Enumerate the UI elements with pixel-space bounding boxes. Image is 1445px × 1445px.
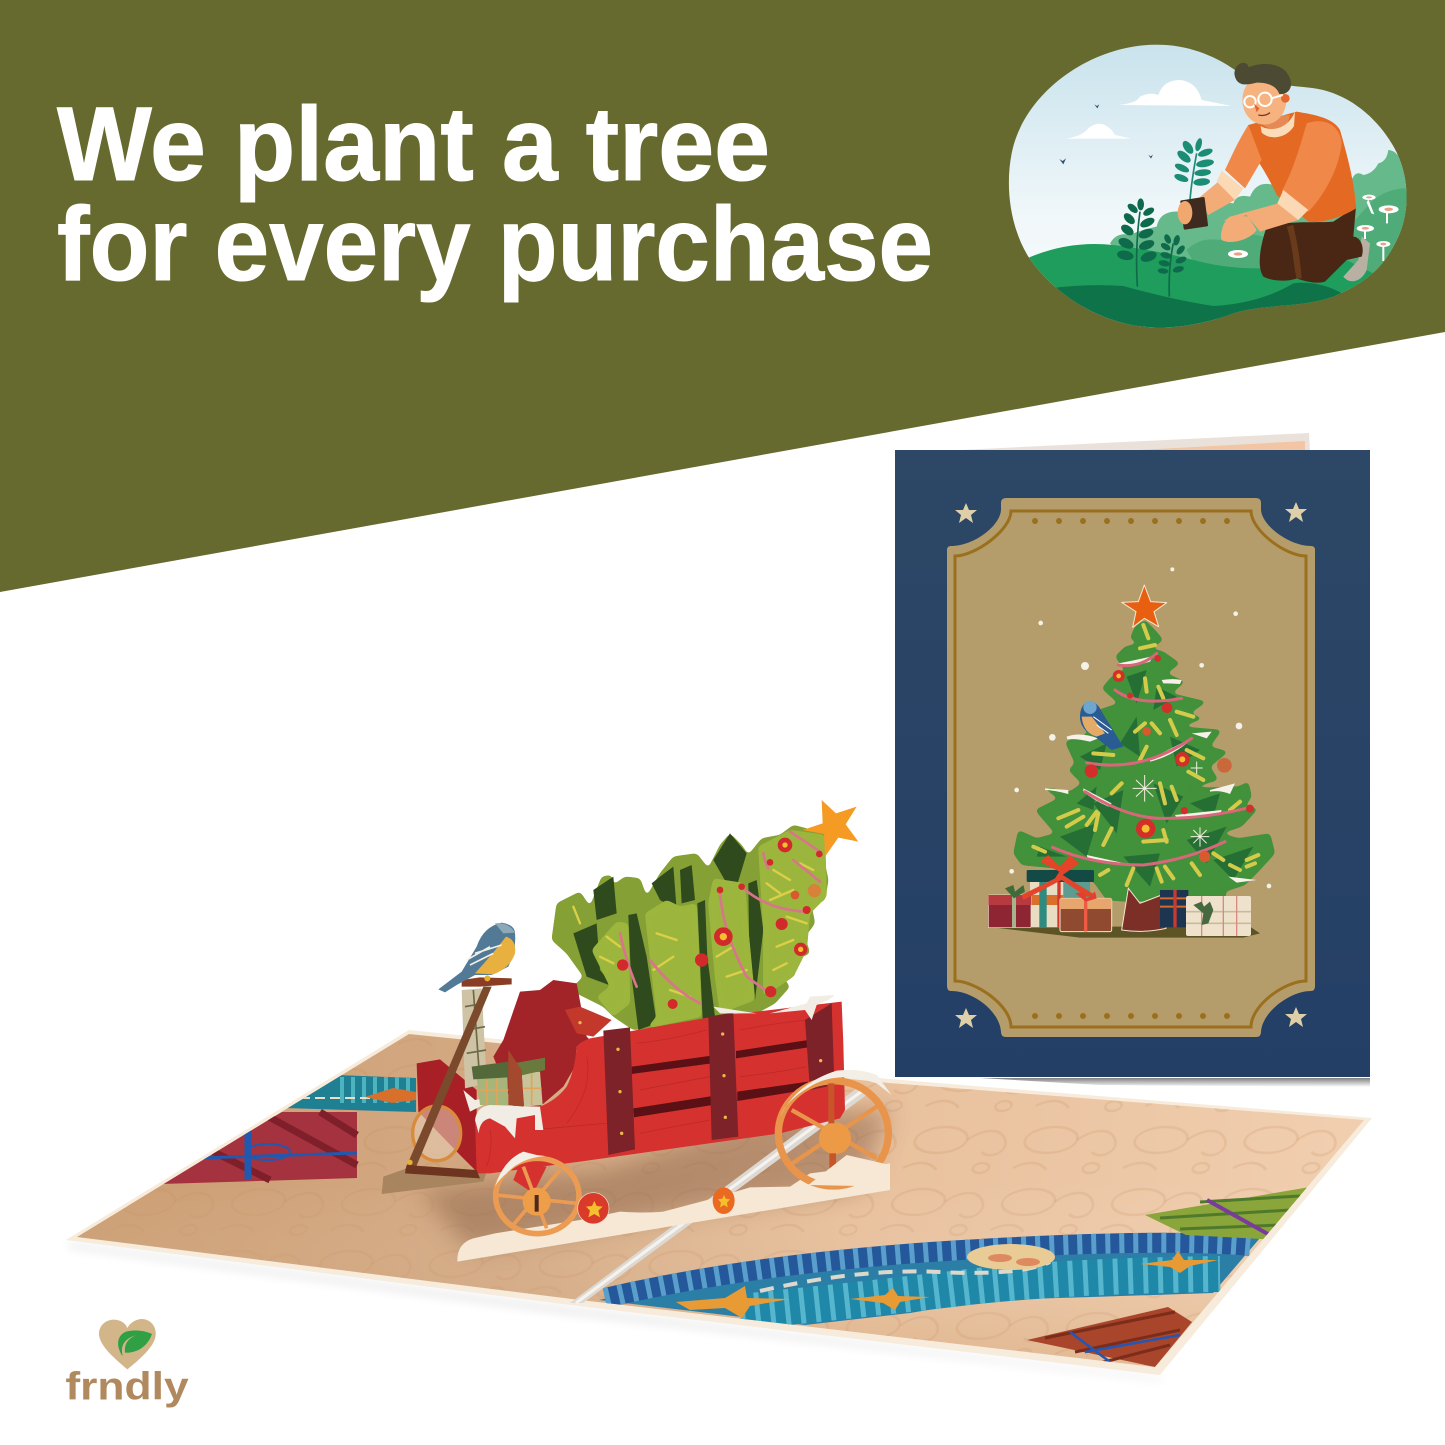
title: for every purchase xyxy=(57,186,933,303)
ground shadow xyxy=(987,927,1260,938)
front wheel xyxy=(495,1152,579,1234)
trunk xyxy=(1122,888,1166,931)
card artwork: christmas tree with gifts xyxy=(987,567,1275,938)
rear hidden wheel xyxy=(413,1106,461,1161)
decorated tall gift xyxy=(462,988,487,1088)
wagon interior xyxy=(493,980,593,1107)
ornaments xyxy=(1085,655,1254,862)
tall plaid gift xyxy=(1027,870,1094,927)
garland stars xyxy=(676,1251,1218,1318)
wood grain xyxy=(487,1020,807,1167)
snow dots xyxy=(1009,567,1271,888)
title: We plant a tree xyxy=(57,86,770,203)
snow on wagon xyxy=(463,995,835,1138)
foliage base xyxy=(552,825,828,1030)
red ribbon bow xyxy=(1022,855,1095,900)
ornament balls xyxy=(578,1187,735,1224)
blue gift xyxy=(1160,890,1188,927)
white snowflakes xyxy=(1133,762,1209,847)
red gift xyxy=(1027,1307,1192,1367)
green plaid gift xyxy=(472,1050,545,1107)
center fold xyxy=(570,1088,868,1303)
product: greeting card cover xyxy=(895,433,1370,1087)
man figure xyxy=(1178,63,1370,283)
orange tree star xyxy=(803,800,858,857)
wagon slots xyxy=(632,1040,808,1117)
title xyxy=(57,86,933,303)
rear wagon section xyxy=(417,1059,477,1172)
rear wheel xyxy=(778,1070,892,1187)
navy cover xyxy=(895,450,1370,1077)
pop-up wagon with christmas tree xyxy=(382,800,892,1262)
pink garlands xyxy=(620,832,820,1003)
wagon interior gift flap xyxy=(565,1007,612,1037)
right page garland xyxy=(599,1238,1260,1325)
foliage shadows xyxy=(1037,670,1253,887)
star topper xyxy=(1122,585,1167,627)
logo heart xyxy=(99,1319,156,1369)
mat art xyxy=(60,1020,1380,1380)
green gift xyxy=(1145,1187,1310,1240)
tree foliage xyxy=(1013,620,1275,902)
ornaments xyxy=(617,838,823,1009)
lighter foliage xyxy=(592,830,827,1028)
product: open pop-up card base xyxy=(60,1020,1380,1381)
wagon base tab xyxy=(382,1168,487,1194)
tan label frame xyxy=(947,498,1315,1037)
logo wordmark: frndly xyxy=(65,1364,189,1408)
brown gift xyxy=(1060,892,1112,932)
gold inner line xyxy=(955,511,1306,1027)
left page garland xyxy=(284,1075,416,1112)
frame dots xyxy=(1032,518,1230,1019)
corner stars xyxy=(955,502,1307,1028)
left page red gift xyxy=(161,1112,357,1184)
wagon ground shadow xyxy=(420,1110,890,1250)
tree bird xyxy=(1080,701,1123,750)
illustration: man planting a tree xyxy=(1008,44,1407,328)
blue bird xyxy=(438,923,515,992)
yellow needles xyxy=(573,863,813,997)
snow ground strip xyxy=(457,1163,890,1262)
white plaid gift xyxy=(1186,896,1251,936)
mat cast shadow xyxy=(66,1243,1165,1381)
mat paper border xyxy=(66,1030,1372,1375)
frndly logo xyxy=(65,1319,189,1408)
card back page xyxy=(940,433,1310,451)
olive diagonal banner xyxy=(0,0,1445,592)
logo leaf xyxy=(118,1330,152,1356)
snow on branches xyxy=(1045,656,1257,883)
seedling plants xyxy=(1116,137,1214,297)
red gift left xyxy=(988,885,1031,928)
ornament xyxy=(967,1244,1055,1270)
yellow needles xyxy=(1033,625,1258,885)
pink garlands xyxy=(1053,653,1250,865)
foliage dark areas xyxy=(573,833,763,1030)
post rivets xyxy=(578,1021,822,1135)
card shadow xyxy=(980,1078,1370,1087)
red wagon side xyxy=(475,1002,845,1173)
wagon handle xyxy=(405,977,512,1178)
wagon posts xyxy=(603,1003,834,1155)
tree foliage xyxy=(552,825,828,1030)
